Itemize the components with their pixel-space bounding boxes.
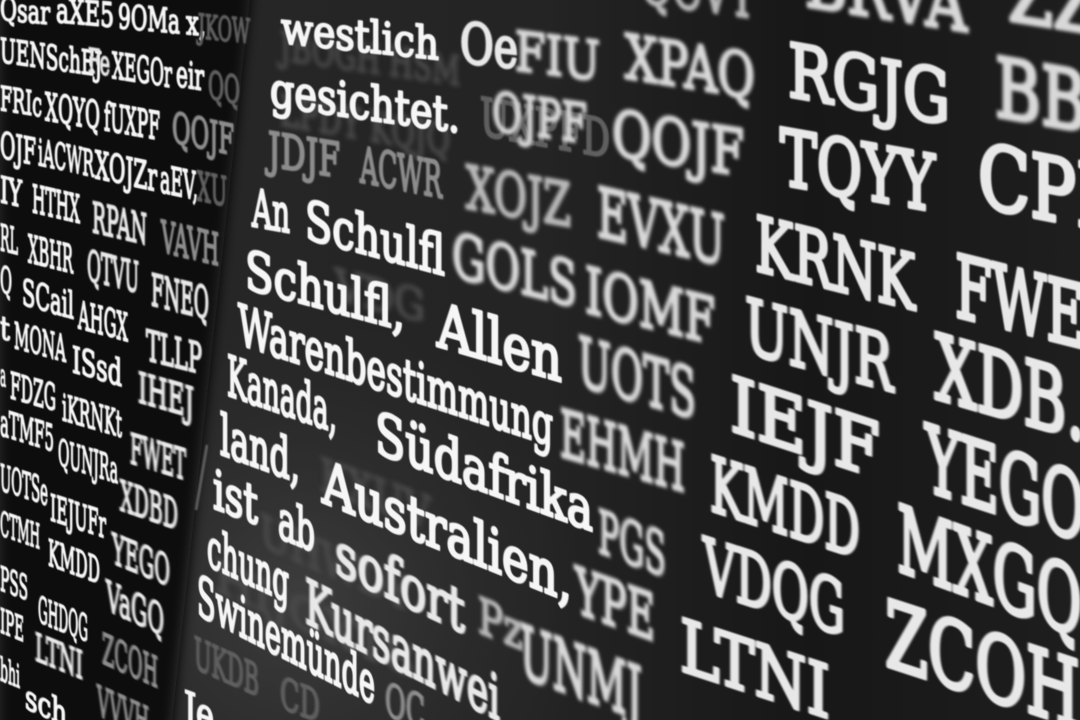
left row 10: QUNJRa: [58, 432, 118, 492]
row 6: Warenbestimmung: Warenbestimmung: [238, 292, 553, 460]
panel: left column of text: FWET: [130, 425, 186, 491]
left row 6: QTVU: [87, 242, 139, 304]
row 1: westlich: FIU: [515, 20, 600, 93]
left row 11: [0, 457, 170, 597]
left row 7: SCail: [22, 272, 74, 328]
row 7: Kanada, Südafrika: [227, 344, 1080, 720]
left row 9: iKRNKt: [62, 387, 122, 446]
left row 14: [0, 601, 149, 720]
row 10: chung Kursanwei: [207, 516, 500, 720]
left row 11: UOTSe: [0, 457, 48, 514]
row 5: Schulfl, Allen: UOTS: [578, 323, 696, 435]
left row 9: a: [0, 359, 6, 395]
left row 2: [0, 31, 240, 114]
left row 2: XEGOr: [112, 44, 172, 96]
row 11: Swinemünde: [197, 563, 425, 720]
left row 1: [0, 0, 250, 52]
row 9: ist ab sofort: Pz: [478, 587, 523, 663]
row 4: An Schulfl: IOMF: [585, 254, 715, 360]
panel: ghost text layer on right wall: KXUV: [320, 448, 431, 542]
left row 6: RL: [0, 217, 18, 263]
row 9: ist ab sofort: [213, 459, 642, 720]
row 6: Warenbestimmung: [238, 292, 1080, 660]
panel: ghost text layer on right wall: JBOGH HSM: [277, 24, 460, 95]
panel: left column of text: TLLP: [146, 322, 202, 385]
left row 14: IPE: [0, 601, 24, 650]
row 0: cut off top line: [640, 0, 1080, 53]
row 7: Kanada, Südafrika: PGS: [598, 496, 666, 591]
row 10: chung Kursanwei: chung: [207, 516, 289, 617]
left row 8: ISsd: [72, 339, 122, 395]
panel: left column of text: VaGQ: [106, 572, 164, 646]
left row 13: GHDQG: [38, 588, 88, 651]
row 4: An Schulfl: [251, 178, 1080, 463]
panel: ghost text layer on right wall: HIJOXTS: [215, 549, 415, 690]
row 2: gesichtet: QOJF: [612, 96, 744, 192]
left row 10: aTMF5: [0, 402, 54, 460]
panel: ghost text layer on right wall: UXPFD: [480, 87, 610, 171]
row 8: land, Australien: Australien,: [321, 446, 572, 617]
row 5: Schulfl, Allen: Schulfl,: [245, 238, 405, 344]
left row 12: KMDD: [48, 531, 100, 593]
row 8: land, Australien: [220, 402, 830, 720]
row 3: JDJF: ACWR: [360, 135, 443, 210]
left row 8: IHEJ: [138, 364, 194, 429]
left row 9: [0, 359, 186, 491]
left row 2: QQ: [208, 63, 240, 114]
row 2: gesichtet: OJPF: [492, 80, 587, 156]
row 9: ist ab sofort: sofort: [335, 517, 465, 648]
row 3: JDJF: KRNK: [755, 200, 916, 329]
row 3: JDJF: JDJF: [265, 122, 340, 189]
row 3: JDJF: XOJZ: [466, 153, 571, 241]
reflection streak on wall edge: [196, 445, 207, 510]
left row 3: fUXPF: [104, 95, 160, 150]
left row 6: [0, 217, 209, 330]
left row 11: IEJUFr: [50, 487, 106, 547]
left row 3: [0, 79, 234, 166]
row 5: Schulfl, Allen: [245, 238, 1080, 564]
left row 12: CTMH: [0, 505, 40, 558]
left row 4: OJF: [0, 124, 36, 174]
panel: left column of text: XU: [197, 162, 227, 216]
row 4: An Schulfl: An: [251, 178, 290, 246]
left row 7: AHGX: [78, 294, 128, 351]
panel: left column of text: XDBD: [120, 472, 178, 541]
panel: left column of text: [0, 0, 250, 720]
left row 3: QOJF: [172, 104, 234, 166]
left row 13: PSS: [0, 559, 28, 609]
left row 14: LTNI: [35, 625, 83, 689]
row 2: gesichtet: [270, 62, 1080, 251]
row 7: Kanada, Südafrika: VDQG: [702, 522, 845, 654]
row 2: gesichtet: TQYY: [780, 112, 936, 230]
left row 13: [0, 559, 158, 698]
left row 7: [0, 259, 202, 385]
left row 4: iACWR: [38, 131, 95, 186]
row 8: land, Australien: YPE: [574, 553, 655, 657]
left row 2: eir: [176, 52, 204, 99]
row 4: An Schulfl: GOLS: [452, 219, 577, 322]
row 1: westlich: westlich: [281, 3, 439, 71]
panel: ghost text layer on right wall: VDG: [334, 259, 425, 333]
row 1: westlich: Oe: [460, 11, 518, 82]
row 6: Warenbestimmung: KMDD: [710, 441, 860, 577]
left row 8: [0, 309, 194, 429]
left row 4: aEV,: [160, 157, 198, 210]
row 4: An Schulfl: UNJR: [745, 282, 895, 411]
panel: ghost text layer on right wall: LPDY KQJQ: [280, 86, 450, 165]
left row 2: UENSchEJ: [0, 31, 102, 85]
row 6: Warenbestimmung: EHMH: [560, 394, 685, 508]
row 8: land, Australien: land,: [220, 402, 300, 497]
panel: left column of text: VAVH: [161, 211, 219, 276]
row 2: gesichtet: gesichtet.: [270, 62, 460, 145]
row 5: Schulfl, Allen: Allen: [436, 288, 562, 397]
row 1: westlich: RGJG: [788, 28, 950, 142]
left row 5: RPAN: [92, 194, 147, 256]
panel: ghost text layer on right wall: UHWDY: [260, 504, 410, 622]
left row 9: FDZG: [10, 365, 56, 420]
background: glow on wall: [0, 280, 700, 720]
background: left wall: [0, 0, 252, 720]
panel: left column of text: YEGO: [112, 524, 170, 597]
row 1: westlich: [281, 3, 1080, 152]
panel: ghost text layer on right wall: [215, 24, 610, 690]
left row 1: JKOW: [196, 7, 250, 52]
left row 8: t: [0, 309, 10, 349]
left row 4: [0, 124, 227, 216]
left row 10: [0, 402, 178, 541]
panel: left column of text: FNEQ: [151, 265, 209, 330]
left row 1: x,: [186, 3, 206, 45]
left row 15: bhi: [0, 650, 20, 696]
left row 15: [0, 650, 67, 720]
row 9: ist ab sofort: ab: [278, 488, 315, 565]
left row 2: Fe: [88, 41, 110, 84]
left row 12: [0, 505, 164, 646]
left row 4: XOJZr: [95, 143, 157, 201]
row 9: ist ab sofort: ist: [213, 459, 258, 538]
row 7: Kanada, Südafrika: Kanada,: [227, 344, 337, 446]
row 3: JDJF: EVXU: [597, 174, 725, 282]
row 3: JDJF: [265, 122, 1080, 369]
left row 5: [0, 168, 219, 276]
left row 3: FRIc: [0, 79, 42, 126]
left row 5: HTHX: [32, 177, 80, 233]
left row 7: Q: [0, 259, 12, 304]
left row 3: XQYQ: [45, 85, 100, 140]
left row 5: IY: [0, 168, 23, 216]
left row 6: XBHR: [28, 228, 73, 283]
row 4: An Schulfl: Schulfl: [305, 188, 445, 288]
left row 8: MONA: [14, 315, 66, 371]
row 7: Kanada, Südafrika: Südafrika: [375, 399, 593, 546]
row 5: Schulfl, Allen: IEJF: [730, 361, 880, 497]
row 1: westlich: XPAQ: [625, 20, 755, 113]
